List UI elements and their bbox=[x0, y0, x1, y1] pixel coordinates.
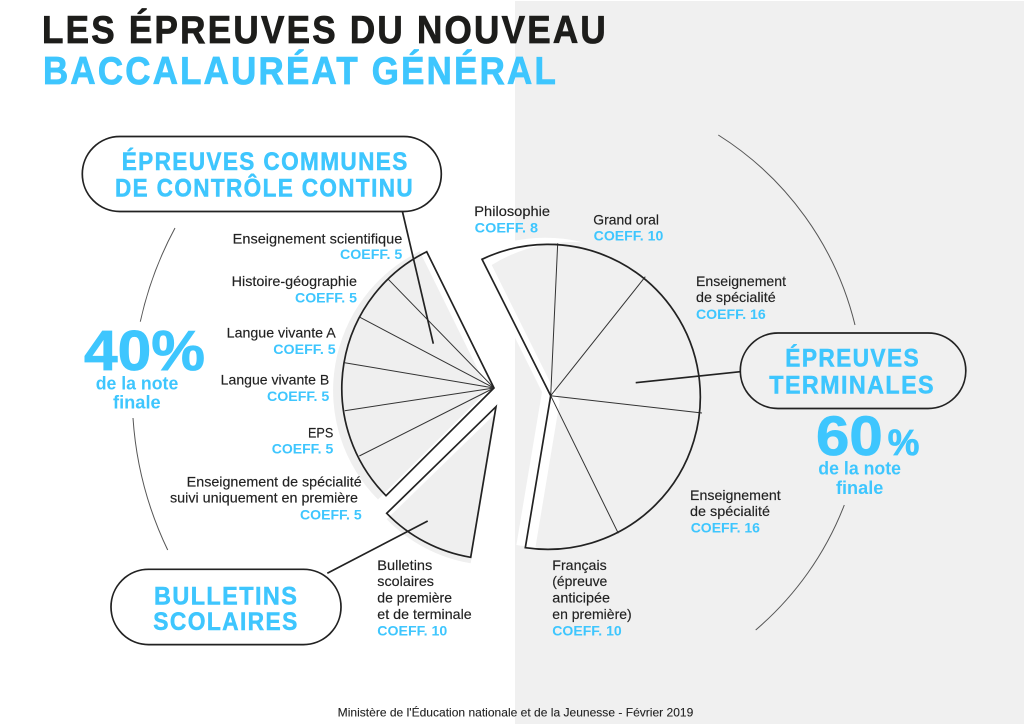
label: enseignement scientifique: COEFF. 5 bbox=[340, 246, 403, 262]
label: français: anticipée bbox=[552, 590, 610, 606]
connector: bulletins scolaires bbox=[327, 521, 428, 573]
label: langue vivante B: Langue vivante B bbox=[221, 371, 329, 387]
label: philosophie: Philosophie bbox=[474, 203, 550, 219]
title: BACCALAURÉAT GÉNÉRAL bbox=[43, 49, 558, 93]
label: bulletins scolaires: Bulletins bbox=[377, 557, 432, 573]
label: histoire-géographie bbox=[232, 273, 357, 305]
title: LES ÉPREUVES DU NOUVEAU bbox=[42, 8, 608, 52]
label: histoire-géographie: Histoire-géographie bbox=[232, 273, 357, 289]
pie: épreuves terminales bbox=[474, 238, 720, 560]
label: français: Français bbox=[552, 557, 607, 573]
label: grand oral: COEFF. 10 bbox=[594, 228, 664, 244]
label: philosophie: COEFF. 8 bbox=[475, 219, 538, 235]
callout: épreuves terminales bbox=[740, 333, 966, 408]
callout: épreuves communes de contrôle continu bbox=[82, 136, 441, 212]
label: français: (épreuve bbox=[552, 573, 608, 589]
label: enseignement de spécialité suivi en première: COEFF. 5 bbox=[300, 506, 362, 522]
callout: épreuves communes de contrôle continu: ÉPREUVES COMMUNES bbox=[122, 147, 409, 176]
stat: 40 percent: de la note bbox=[96, 373, 178, 393]
label: langue vivante B: COEFF. 5 bbox=[267, 388, 330, 404]
label: enseignement de spécialité 2 bbox=[690, 487, 781, 536]
label: EPS: EPS bbox=[308, 424, 333, 440]
label: enseignement de spécialité suivi en première bbox=[170, 474, 362, 522]
label: langue vivante A: COEFF. 5 bbox=[273, 341, 336, 357]
label: enseignement de spécialité suivi en première: suivi uniquement en première bbox=[170, 490, 358, 506]
label: EPS: COEFF. 5 bbox=[272, 440, 334, 456]
label: français: en première) bbox=[552, 606, 632, 622]
label: bulletins scolaires: COEFF. 10 bbox=[377, 622, 448, 638]
label: enseignement de spécialité 1: de spécialité bbox=[696, 289, 776, 305]
callout: bulletins scolaires bbox=[111, 569, 341, 645]
label: bulletins scolaires bbox=[377, 557, 472, 638]
label: français bbox=[552, 557, 632, 638]
stat: 60 percent: 60 bbox=[816, 404, 883, 467]
stat: 40 percent: finale bbox=[113, 392, 161, 412]
connector: épreuves terminales bbox=[636, 372, 740, 383]
connector: épreuves communes bbox=[402, 211, 433, 344]
label: EPS bbox=[272, 424, 334, 456]
label: enseignement scientifique: Enseignement scientifique bbox=[233, 231, 403, 247]
label: enseignement de spécialité 2: COEFF. 16 bbox=[691, 520, 760, 536]
stat: 60 percent: finale bbox=[836, 478, 883, 498]
label: bulletins scolaires: scolaires bbox=[377, 573, 434, 589]
label: histoire-géographie: COEFF. 5 bbox=[295, 289, 357, 305]
stat: 60 percent: de la note bbox=[818, 458, 901, 478]
grey right background panel bbox=[515, 1, 1024, 724]
label: enseignement de spécialité 2: de spécialité bbox=[690, 503, 770, 519]
callout: bulletins scolaires: BULLETINS bbox=[154, 582, 298, 610]
label: enseignement de spécialité suivi en première: Enseignement de spécialité bbox=[187, 474, 362, 490]
label: philosophie bbox=[474, 203, 550, 235]
stat: 60 percent bbox=[816, 404, 919, 498]
label: enseignement scientifique bbox=[233, 231, 403, 262]
title bbox=[42, 8, 608, 93]
label: grand oral: Grand oral bbox=[593, 211, 659, 227]
label: langue vivante B bbox=[221, 371, 330, 404]
pie: bulletins scolaires bbox=[387, 407, 496, 563]
callout: bulletins scolaires: SCOLAIRES bbox=[153, 608, 299, 636]
label: grand oral bbox=[593, 211, 664, 244]
label: enseignement de spécialité 1: Enseignement bbox=[696, 273, 786, 289]
label: bulletins scolaires: et de terminale bbox=[377, 606, 472, 622]
label: enseignement de spécialité 1 bbox=[696, 273, 786, 322]
pie: épreuves communes de contrôle continu bbox=[333, 251, 494, 500]
source footer: Ministère de l'Éducation nationale et de la Jeunesse - Février 2019 bbox=[338, 705, 694, 720]
label: enseignement de spécialité 1: COEFF. 16 bbox=[696, 306, 766, 322]
callout: épreuves communes de contrôle continu: DE CONTRÔLE CONTINU bbox=[115, 173, 414, 203]
callout: épreuves terminales: TERMINALES bbox=[769, 371, 935, 399]
callout: épreuves terminales: ÉPREUVES bbox=[785, 344, 920, 373]
arc: right 60 percent bracket bbox=[718, 135, 855, 630]
stat: 40 percent: 40% bbox=[84, 319, 205, 383]
stat: 40 percent bbox=[84, 319, 205, 412]
stat: 60 percent: % bbox=[888, 422, 919, 463]
label: langue vivante A bbox=[227, 325, 336, 357]
label: enseignement de spécialité 2: Enseignement bbox=[690, 487, 781, 503]
label: bulletins scolaires: de première bbox=[377, 590, 452, 606]
label: français: COEFF. 10 bbox=[552, 622, 622, 638]
label: langue vivante A: Langue vivante A bbox=[227, 325, 336, 341]
arc: left 40 percent bracket bbox=[133, 228, 175, 550]
